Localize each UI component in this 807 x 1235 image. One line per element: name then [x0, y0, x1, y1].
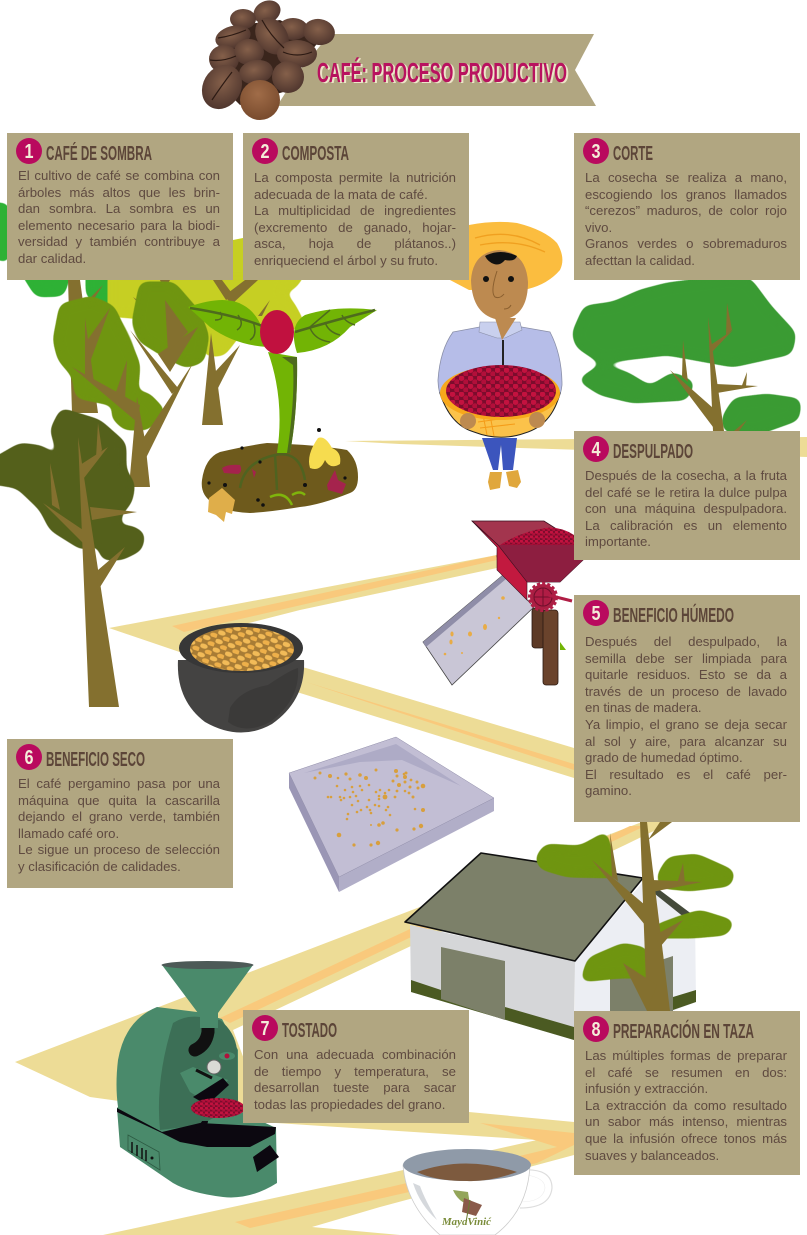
- text 5: [585, 634, 787, 798]
- compost sprout with cherry: [188, 300, 377, 522]
- text 6: y clasificación de calidades.: [18, 859, 181, 874]
- text 3: [585, 170, 787, 268]
- text 8: el café se resumen en dos:: [585, 1065, 787, 1080]
- farmhouse with tree: [405, 822, 735, 1040]
- text 8: La extracción da como resultado: [585, 1098, 787, 1113]
- badge 3: [583, 138, 609, 164]
- text 1: árboles más altos que les brin-: [18, 185, 220, 200]
- text 6: [18, 776, 220, 874]
- text 4: [585, 468, 787, 549]
- text 2: [254, 170, 456, 268]
- text 1: dar calidad.: [18, 251, 86, 266]
- text 1: dan sombra. La sombra es un: [18, 201, 220, 216]
- text 7: Con una adecuada combinación: [254, 1047, 456, 1062]
- text 5: través de un proceso de lavado: [585, 684, 787, 699]
- badge 1: 1: [24, 141, 34, 163]
- badge 5: [583, 600, 609, 626]
- heading 1: CAFÉ DE SOMBRA: [46, 142, 152, 165]
- badge 7: [252, 1015, 278, 1041]
- heading 6: BENEFICIO SECO: [46, 749, 145, 771]
- text 2: La composta permite la nutrición: [254, 170, 456, 185]
- badge 7: 7: [260, 1018, 270, 1040]
- panel 2: composta: [243, 133, 469, 280]
- trousers: [482, 438, 517, 470]
- farmer with basket: [438, 222, 562, 490]
- text 3: Granos verdes o sobremaduros: [585, 236, 787, 251]
- heading 4: DESPULPADO: [613, 441, 693, 463]
- panel 5: beneficio húmedo: [574, 595, 800, 822]
- text 4: con una máquina despulpadora.: [585, 501, 787, 516]
- badge 8: 8: [592, 1019, 600, 1041]
- text 3: “cerezos” maduros, de color rojo: [585, 203, 787, 218]
- basket: [440, 393, 560, 437]
- title ribbon: [277, 34, 596, 106]
- panel 8: preparación en taza: [574, 1011, 800, 1175]
- title ribbon: CAFÉ: PROCESO PRODUCTIVO: [317, 57, 567, 88]
- panel 6: beneficio seco: [7, 739, 233, 888]
- badge 6: 6: [24, 747, 34, 769]
- text 4: importante.: [585, 534, 651, 549]
- soil mound: [202, 443, 358, 513]
- text 8: un sabor más intenso, mientras: [585, 1114, 787, 1129]
- banana peel: [309, 437, 340, 469]
- tree: yellow-green canopy: [108, 238, 308, 425]
- text 1: elemento necesario para la biodi-: [18, 218, 220, 233]
- tree: bright green: [0, 203, 122, 413]
- text 8: infusión y extracción.: [585, 1081, 708, 1096]
- text 7: [254, 1047, 456, 1112]
- text 3: vivo.: [585, 220, 612, 235]
- logo: MayaVinić: [441, 1216, 492, 1228]
- badge 6: [16, 744, 42, 770]
- text 5: gamino.: [585, 783, 632, 798]
- badge 1: [16, 138, 42, 164]
- heading 3: CORTE: [613, 143, 653, 165]
- shirt: [438, 326, 562, 420]
- heading 2: COMPOSTA: [282, 143, 349, 165]
- text 2: (excremento de ganado, hojar-: [254, 220, 456, 235]
- text 8: que la infusión ofrece tonos más: [585, 1131, 787, 1146]
- text 6: El café pergamino pasa por una: [18, 776, 220, 791]
- text 8: Las múltiples formas de preparar: [585, 1048, 787, 1063]
- heading 7: TOSTADO: [282, 1020, 337, 1042]
- badge 2: 2: [260, 141, 270, 163]
- logo: [441, 1190, 492, 1228]
- panel 3: corte: [574, 133, 800, 280]
- badge 8: [583, 1016, 609, 1042]
- text 2: asca, hoja de plátanos..): [254, 236, 456, 251]
- icon: coffee beans: [194, 0, 337, 120]
- badge 2: [252, 138, 278, 164]
- coffee roaster: [116, 961, 279, 1197]
- text 2: enriqueciend el árbol y su fruto.: [254, 253, 438, 268]
- text 5: grado de humedad óptimo.: [585, 750, 743, 765]
- tree: olive foreground: [53, 282, 209, 487]
- text 5: en tinas de madera.: [585, 700, 702, 715]
- dry leaf: [208, 488, 235, 522]
- sandals: [488, 470, 521, 490]
- panel 1: café de sombra: [7, 133, 233, 280]
- text 3: escogiendo los granos llamados: [585, 187, 787, 202]
- text 5: quitarle residuos. Esto se da a: [585, 667, 787, 682]
- text 7: todas las propiedades del grano.: [254, 1097, 445, 1112]
- hat: [450, 222, 562, 290]
- panel 7: tostado: [243, 1010, 469, 1123]
- yellow path streaks: [15, 437, 807, 1235]
- hands: [460, 413, 476, 429]
- face: [471, 250, 528, 320]
- leaves: [188, 300, 267, 347]
- text 6: Le sigue un proceso de selección: [18, 842, 220, 857]
- text 4: Después de la cosecha, a la fruta: [585, 468, 787, 483]
- text 6: llamado café oro.: [18, 826, 119, 841]
- text 5: Ya limpio, el grano se deja secar: [585, 717, 787, 732]
- cherry: [260, 310, 294, 354]
- text 5: El resultado es el café per-: [585, 767, 787, 782]
- text 3: La cosecha se realiza a mano,: [585, 170, 787, 185]
- text 8: [585, 1048, 787, 1163]
- drying tray: [289, 737, 494, 892]
- text 6: máquina que quita la cascarilla: [18, 793, 220, 808]
- badge 5: 5: [592, 603, 600, 625]
- text 5: Después del despulpado, la: [585, 634, 787, 649]
- coffee pulping machine: [423, 521, 583, 685]
- text 4: del café se le retira la dulce pulpa: [585, 485, 787, 500]
- text 3: afecttan la calidad.: [585, 253, 695, 268]
- text 2: adecuada de la mata de café.: [254, 187, 428, 202]
- badge 4: [583, 436, 609, 462]
- text 7: de tiempo y temperatura, se: [254, 1064, 456, 1079]
- text 8: suaves y balanceados.: [585, 1148, 719, 1163]
- text 1: El cultivo de café se combina con: [18, 168, 220, 183]
- stem: [268, 352, 297, 453]
- black pot of pulped beans: [178, 623, 304, 733]
- tree: right green: [572, 275, 801, 435]
- badge 3: 3: [592, 141, 600, 163]
- tree: dark green: [0, 408, 145, 707]
- text 7: desarrollan tueste para sacar: [254, 1080, 456, 1095]
- text 1: versidad y también contribuye a: [18, 234, 220, 249]
- text 6: dejando el grano verde, también: [18, 809, 220, 824]
- panel 4: despulpado: [574, 431, 800, 560]
- coffee cup with logo: [403, 1149, 552, 1235]
- text 4: La calibración es un elemento: [585, 518, 787, 533]
- text 1: [18, 168, 220, 266]
- text 5: al sol y aire, para alcanzar su: [585, 734, 787, 749]
- text 5: semilla debe ser limpiada para: [585, 651, 787, 666]
- text 2: La multiplicidad de ingredientes: [254, 203, 456, 218]
- title ribbon: CAFÉ: PROCESO PRODUCTIVO: [319, 58, 569, 89]
- badge 4: 4: [592, 439, 601, 461]
